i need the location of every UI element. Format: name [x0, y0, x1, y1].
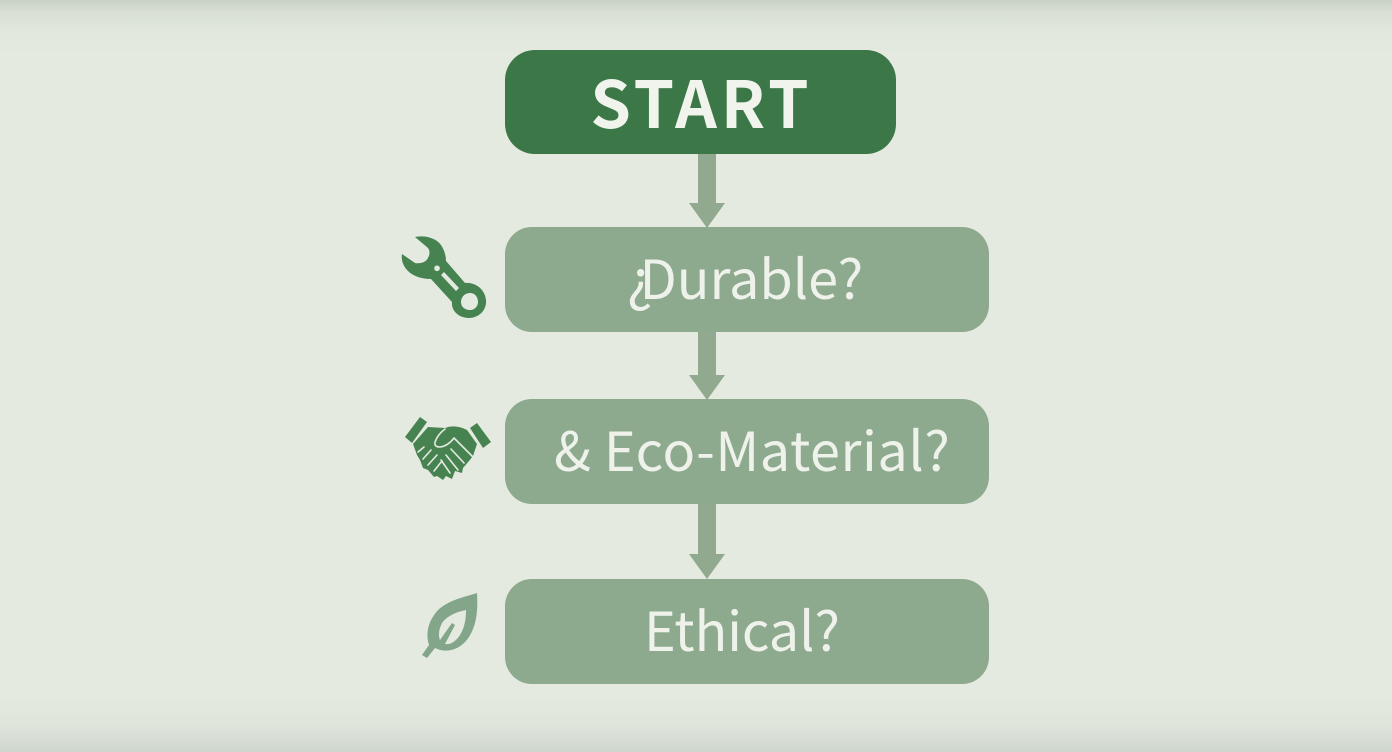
step: durable: [505, 227, 989, 332]
ethical label: Ethical?: [644, 588, 840, 667]
start label: START: [590, 53, 813, 147]
arrow: start to durable: [689, 154, 725, 228]
arrow: durable to eco-material: [689, 332, 725, 400]
icon: leaf: [422, 593, 478, 658]
durable label: ¿Durable?: [627, 236, 863, 315]
start box: [505, 50, 896, 154]
icon: wrench: [402, 236, 486, 318]
step: ethical: [505, 579, 989, 684]
icon: handshake: [405, 417, 491, 480]
eco-material label: & Eco-Material?: [554, 408, 950, 487]
step: eco-material: [505, 399, 989, 504]
arrow: eco-material to ethical: [689, 504, 725, 579]
